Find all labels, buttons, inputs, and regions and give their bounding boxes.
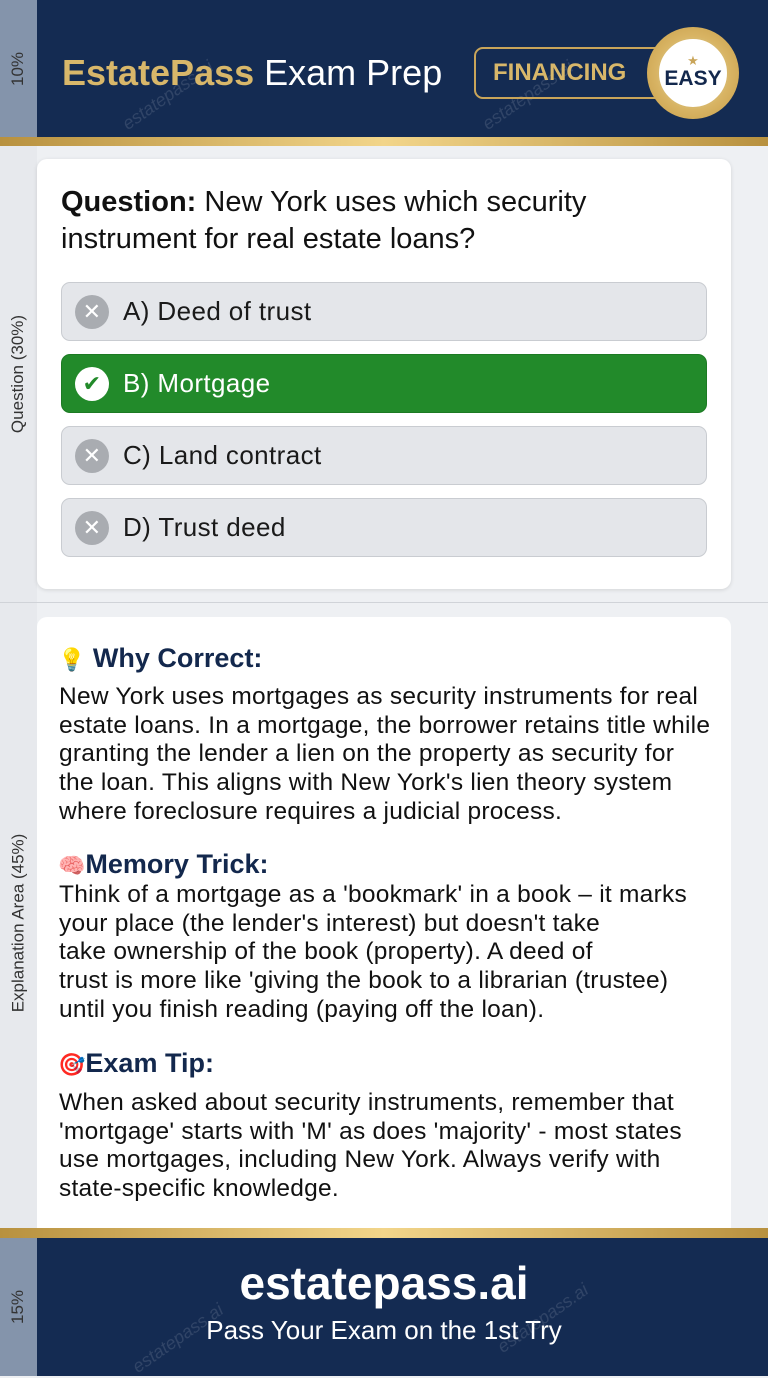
why correct text: where foreclosure requires a judicial process. — [59, 798, 562, 825]
header — [0, 0, 768, 137]
memory trick heading: 🧠Memory Trick: — [58, 849, 268, 879]
exam tip text: use mortgages, including New York. Always verify with — [59, 1146, 661, 1173]
option A — [61, 282, 707, 341]
footer: estatepass.ai — [494, 1279, 592, 1357]
option A: A) Deed of trust — [123, 296, 311, 326]
option D: ✕ — [83, 514, 101, 540]
question card — [37, 159, 731, 589]
exam tip text: 'mortgage' starts with 'M' as does 'majority' - most states — [59, 1118, 682, 1145]
memory trick text: take ownership of the book (property). A deed of — [59, 938, 593, 965]
option B correct — [61, 354, 707, 413]
footer — [0, 1238, 768, 1376]
option B correct: ✔ — [83, 370, 101, 396]
exam tip text: state-specific knowledge. — [59, 1175, 339, 1202]
explanation card — [37, 617, 731, 1237]
category badge — [474, 47, 674, 99]
why correct heading: 💡 Why Correct: — [58, 643, 262, 673]
difficulty seal: ★ — [687, 53, 699, 68]
footer percent label: 15% — [8, 1290, 28, 1324]
option C: C) Land contract — [123, 440, 322, 470]
memory trick text: Think of a mortgage as a 'bookmark' in a book – it marks — [59, 881, 687, 908]
memory trick text: trust is more like 'giving the book to a librarian (trustee) — [59, 967, 668, 994]
exam tip heading: 🎯Exam Tip: — [58, 1048, 214, 1078]
why correct text: granting the lender a lien on the property as security for — [59, 740, 674, 767]
option A: ✕ — [83, 298, 101, 324]
header: estatepass.ai — [119, 56, 217, 134]
memory trick text: until you finish reading (paying off the loan). — [59, 996, 544, 1023]
exam tip text: When asked about security instruments, remember that — [59, 1089, 674, 1116]
difficulty seal — [647, 27, 739, 119]
explanation section label: Explanation Area (45%) — [9, 833, 28, 1012]
memory trick text — [59, 881, 687, 1023]
difficulty seal: EASY — [664, 67, 722, 90]
footer tagline: Pass Your Exam on the 1st Try — [206, 1315, 562, 1345]
why correct text: the loan. This aligns with New York's lien theory system — [59, 769, 672, 796]
header: estatepass.ai — [479, 56, 577, 134]
option C — [61, 426, 707, 485]
footer: estatepass.ai — [129, 1299, 227, 1377]
header percent label: 10% — [8, 51, 28, 86]
why correct text — [59, 683, 710, 825]
category badge: FINANCING — [493, 59, 626, 86]
option D: D) Trust deed — [123, 512, 286, 542]
question text: Question: New York uses which security instrument for real estate loans? — [61, 186, 586, 255]
why correct text: New York uses mortgages as security instruments for real — [59, 683, 698, 710]
option C: ✕ — [83, 442, 101, 468]
footer brand: estatepass.ai — [240, 1257, 528, 1309]
exam tip text — [59, 1089, 682, 1202]
memory trick text: your place (the lender's interest) but doesn't take — [59, 910, 600, 937]
why correct text: estate loans. In a mortgage, the borrower retains title while — [59, 712, 710, 739]
option B correct: B) Mortgage — [123, 368, 270, 398]
option D — [61, 498, 707, 557]
title: EstatePass Exam Prep — [62, 52, 442, 93]
question section label: Question (30%) — [8, 315, 28, 433]
